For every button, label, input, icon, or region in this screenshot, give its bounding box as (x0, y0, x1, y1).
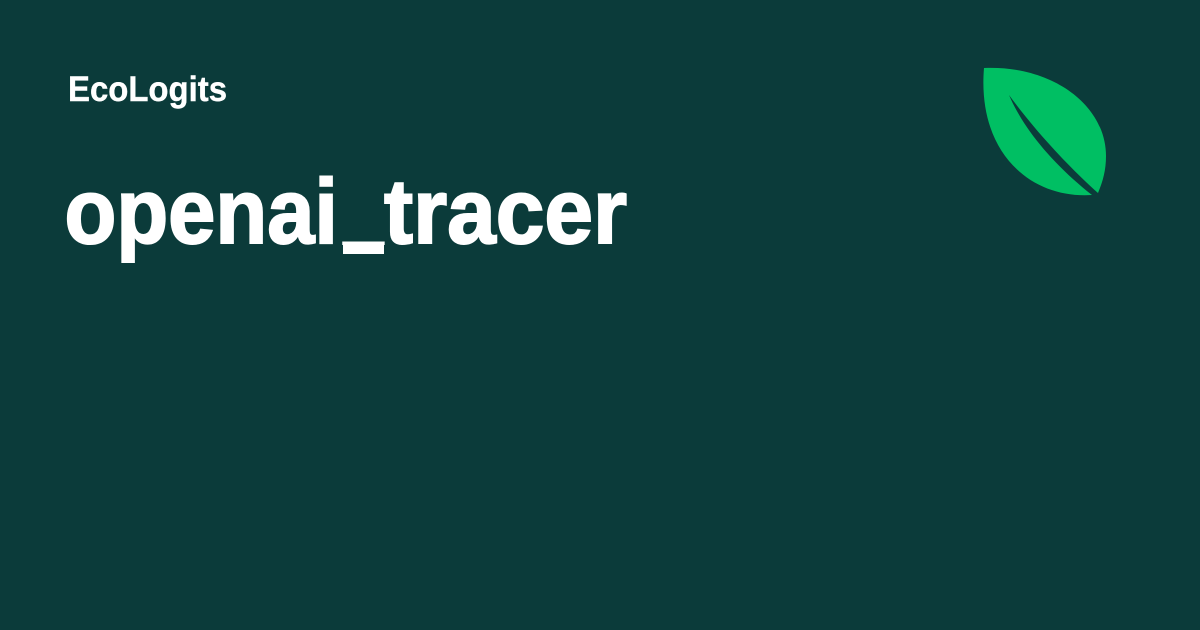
page title: _ (342, 152, 385, 254)
brand name: EcoLogits (68, 70, 227, 109)
icon: green leaf (983, 68, 1106, 195)
page title: openai (64, 161, 338, 263)
page title: tracer (384, 161, 627, 263)
page title (64, 152, 627, 263)
